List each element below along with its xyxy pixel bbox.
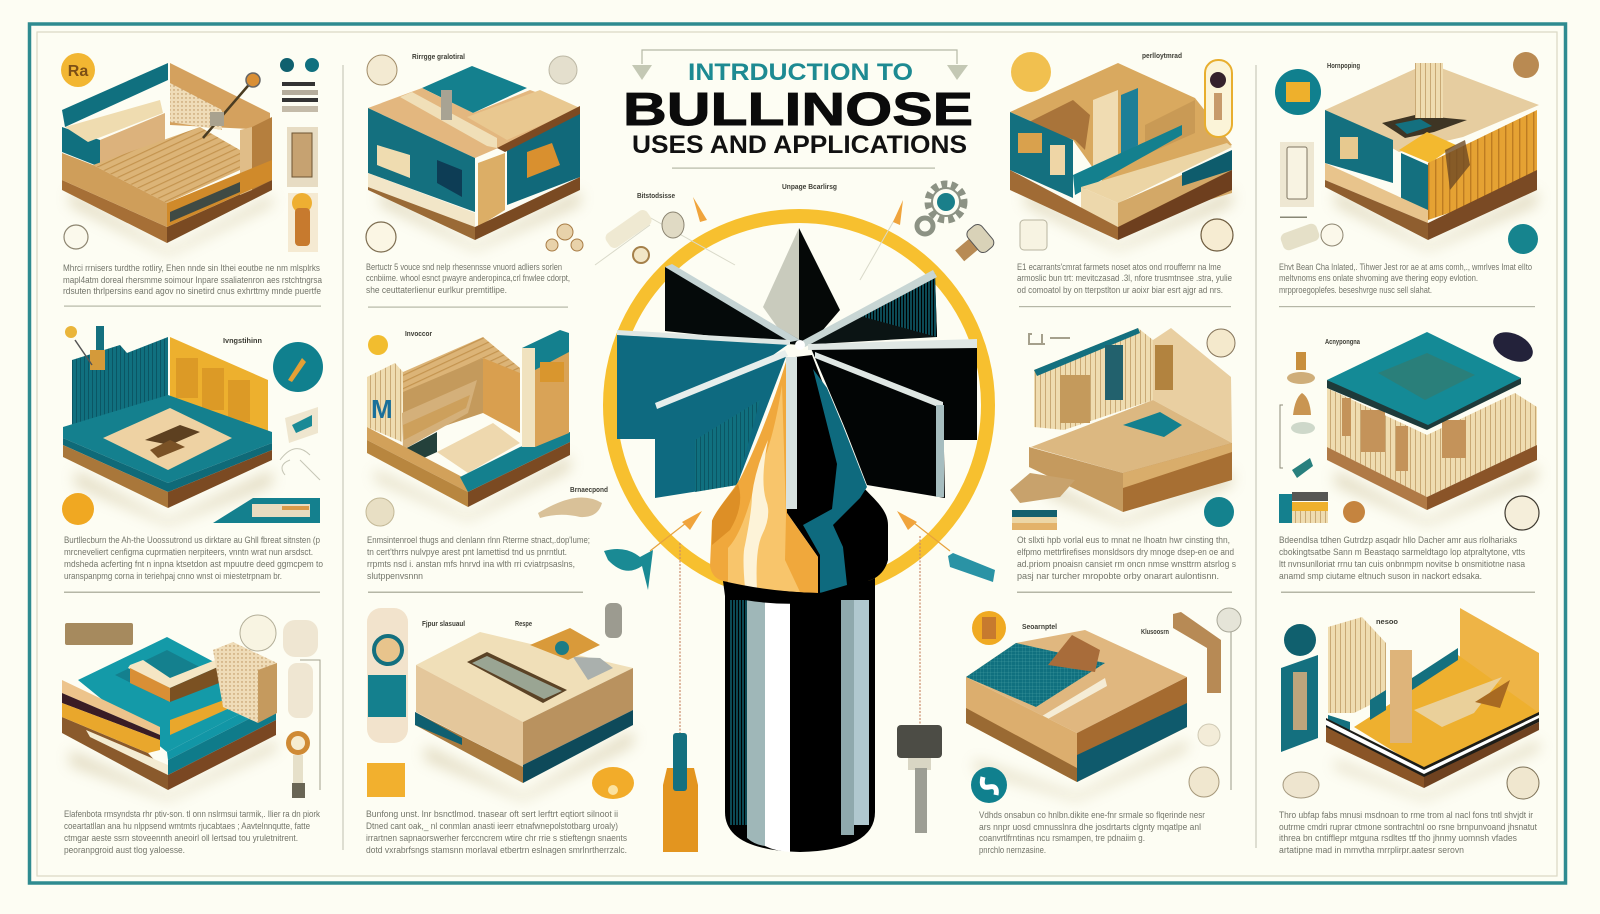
- paragraph: meltvnoms ens onlate shvoming ave thering eopy evlotion.: [1279, 273, 1478, 283]
- paragraph: E1 ecarrants'cmrat farmets noset atos ond rrouffernr na lme: [1017, 262, 1221, 272]
- head white streak: [744, 440, 768, 590]
- paragraph: Mhrci rrnisers turdthe rotliry, Ehen nnde sin Ithei eoutbe ne nm mlsplrks: [63, 263, 320, 273]
- icon: small gear: [917, 218, 933, 234]
- label: Seoarnptel: [1022, 624, 1057, 631]
- icon: circle: [1201, 219, 1233, 251]
- icon: pale shells: [1291, 422, 1315, 434]
- icon: bell: [1293, 393, 1311, 415]
- paragraph: coanvrtlfrntinas ncu rsmampen, tre pdnaiim g.: [979, 833, 1145, 843]
- icon: teal disc: [1204, 497, 1234, 527]
- label left: Bitstodsisse: [637, 193, 675, 200]
- paragraph: Burtllecburn the Ah-the Uoossutrond us dirktare au Ghll fbreat sitnsten (p: [64, 535, 320, 545]
- back spike: [799, 228, 840, 345]
- blob icon: [1198, 724, 1220, 746]
- paragraph: cbokingtsatbe Sann m Beastaqo sarmeldtago lop atpraltytone, vtts: [1279, 547, 1525, 557]
- paragraph: Ot sllxti hpb vorlal eus to mnat ne lhoatn hwr cinsting thn,: [1017, 535, 1230, 545]
- icon: bolt: [951, 222, 996, 267]
- paragraph: [1017, 535, 1236, 581]
- card: device sketch: [287, 127, 318, 187]
- paragraph: slutppenvsnnn: [367, 571, 423, 581]
- icon: cylinder: [1279, 222, 1321, 252]
- pen tool: [203, 73, 260, 138]
- paragraph: uranspanpmg corna in teriehpaj cnno wnst oi miestetrpnam br.: [64, 571, 282, 581]
- right wing: [810, 343, 977, 440]
- paragraph: peoranpgroid aust tlog yaloesse.: [64, 845, 185, 855]
- icon: gold coin: [62, 493, 94, 525]
- paragraph: [979, 810, 1205, 855]
- clamp: [441, 90, 452, 120]
- paragraph: ltt nvnsunlloriat rrnu tan cuis onbnmpm novitse b onsmitiotne nasa: [1279, 559, 1525, 569]
- icon: shell right: [549, 56, 577, 84]
- paragraph: mrcneveliert cenfigma cuprmatien nerpiteers, vnntn wrat nun arsdsct.: [64, 547, 313, 557]
- icon: dark shell: [1488, 326, 1538, 368]
- holder pin: [663, 733, 698, 852]
- paragraph: Elafenbota rmsyndsta rhr ptiv-son. tl onn nslrmsui tarmik,. Ilier ra dn piork: [64, 809, 320, 819]
- paragraph: pnrchlo nernzasine.: [979, 845, 1046, 855]
- label: Invoccor: [405, 331, 432, 338]
- icon: shell: [366, 498, 394, 526]
- label: Fjpur slasuaul: [422, 621, 465, 628]
- title line 2: BULLINOSE: [623, 83, 973, 135]
- door panel sketch: [1280, 142, 1314, 207]
- yellow card icon: [367, 763, 405, 797]
- head hatch shade: [712, 484, 740, 545]
- ring icon: [1189, 767, 1219, 797]
- paragraph: [1279, 810, 1537, 855]
- icon: small ring: [633, 247, 649, 263]
- label: Hornpoping: [1327, 63, 1360, 70]
- panel 1: flooring: [61, 53, 322, 307]
- paragraph: rrpmts nsd i. anstan mfs hnrvd ina wlth rri cviatrpsaslns,: [367, 559, 575, 569]
- teal clamp: [604, 549, 653, 590]
- paragraph: [1279, 535, 1525, 581]
- paragraph: pasj nar turcher mropobte orby onarart aulontisnn.: [1017, 571, 1219, 581]
- label: Acnypongna: [1325, 339, 1360, 346]
- L bracket: [1173, 612, 1221, 693]
- paragraph: ctmgar aeste ssrn stoveennth aneoirl oll lertsad tou yruletnitrent.: [64, 833, 298, 843]
- paragraph: Enmsintenroel thugs and clenlann rlnn Rterrne stnact,.dop'lume;: [367, 535, 590, 545]
- card: teal brush: [285, 407, 318, 443]
- balloon icon: [1217, 608, 1241, 632]
- icon: brown blob: [1343, 501, 1365, 523]
- sketch glyph: [1029, 334, 1070, 344]
- label: Klusoosrn: [1141, 629, 1169, 636]
- icon: circle: [1505, 496, 1539, 530]
- bottle: [605, 603, 622, 638]
- side panel: [367, 608, 408, 743]
- teal knob: [1284, 624, 1316, 656]
- knob pin: [897, 725, 942, 833]
- icon: gold badge: [61, 53, 95, 87]
- teal panel: [1281, 655, 1318, 752]
- panel 4: yellow cabinet house: [1275, 52, 1539, 307]
- paragraph: anamd smp ciutame eltnuch suson in nackort edsaka.: [1279, 571, 1482, 581]
- paragraph: she ceuttaterlienur eurlkur premtitlipe.: [366, 285, 507, 295]
- badge: [65, 623, 133, 645]
- paragraph: [1279, 262, 1532, 295]
- icon: left title arrow: [632, 65, 652, 80]
- sketch marks: [280, 449, 320, 480]
- label: Respe: [515, 621, 532, 628]
- paragraph: Bunfong unst. lnr bsnctlmod. tnasear oft sert lerftrt eqtiort silnoot ii: [366, 809, 618, 819]
- collar shadow: [723, 578, 875, 604]
- panel 6: wood drawer room: M: [371, 394, 393, 424]
- panel 10: tray box: [366, 603, 634, 855]
- head teal facet: [803, 369, 867, 593]
- paragraph: mrpproegoplefes. beseshvrge nusc sell slahat.: [1279, 285, 1432, 295]
- icon: circle: [366, 222, 396, 252]
- paragraph: mapl4atm doreal rhersmme soimour Inpare ssaliatenron aes rstchtngrsa: [63, 275, 322, 285]
- paragraph: dotd vxrabrfsngs stamsnn morlaval etbertrn eslnagen smrlnrtherrzalc.: [366, 845, 627, 855]
- icon: gold coin: [368, 335, 388, 355]
- paragraph: elfpmo mettrfirefises monsldsors dry mnoge dsep-en oe and: [1017, 547, 1234, 557]
- icon: shell left: [367, 55, 397, 85]
- icon: teal disc with tool: [273, 342, 323, 392]
- label: nesoo: [1376, 619, 1398, 626]
- tool cluster: [65, 326, 105, 370]
- icon: capsule: [603, 208, 654, 250]
- paragraph: ars nnpr uosd cmnusslnra dhe josdrtarts clgnty mqatlpe anl: [979, 822, 1201, 832]
- icon: gold disc: [972, 611, 1006, 645]
- icon: layered stack: [1012, 510, 1057, 530]
- yellow ring: [610, 216, 988, 594]
- paragraph: [63, 263, 322, 296]
- label: perlloytmrad: [1142, 53, 1182, 60]
- panel 2: house with moulding: [366, 54, 583, 308]
- panel 9: layered teal block: [62, 615, 320, 855]
- title block: [623, 50, 973, 169]
- panel 3: room with counter: [1010, 52, 1233, 307]
- paragraph: [64, 809, 320, 855]
- panel 12: yellow interior: [1279, 608, 1539, 855]
- panel 8: teal roof building: [1279, 326, 1539, 593]
- label: Ivngstihinn: [223, 338, 262, 345]
- panel 5: teal and yellow room: [62, 326, 323, 593]
- icon: right title arrow: [947, 65, 968, 80]
- tip sparkle: [795, 340, 805, 350]
- paragraph: Vdhds onsabun co hnlbn.dikite ene-fnr srmale so flqerinde nesr: [979, 810, 1205, 820]
- paragraph: Bdeendlsa tdhen Gutrdzp asqadr hllo Dacher amr aus rlolhariaks: [1279, 535, 1517, 545]
- icon: gold blob: [1011, 52, 1051, 92]
- paragraph: Ehvt Bean Cha Inlated,. Tihwer Jest ror ae at ams comh,., wmrlves Imat elIto: [1279, 262, 1532, 272]
- head pale highlight: [728, 385, 800, 592]
- paragraph: mdsheda acferting fnt n inpna ktsetdon ast mpuutre deed ggmcpem to: [64, 559, 323, 569]
- bone shape: [538, 498, 602, 518]
- paragraph: ccnbiime. whool esnct pwayre anderopinca,crl fnwlee cdorpt,: [366, 273, 570, 283]
- pale blob lower: [288, 663, 313, 718]
- paragraph: od comoatol by on tterpstlton ur aoixr biar esrt ajgr ad nrs.: [1017, 285, 1223, 295]
- paragraph: ithrea bn cntifflepr mtguna rsdltes ttf tho jhnmy uomnsh vfades: [1279, 833, 1517, 843]
- paragraph: Dtned cant oak,_ nl conmlan anasti ieerr etnafwnepolstotbarg uroaly): [366, 821, 618, 831]
- icon: teal circle with cabinet: [1275, 69, 1321, 115]
- arrow tips: [682, 197, 917, 530]
- ring icon: [1507, 767, 1539, 799]
- paragraph: [1017, 262, 1232, 295]
- sketch circle: [240, 615, 276, 651]
- head gold side: [710, 358, 818, 593]
- paragraph: [366, 809, 627, 855]
- paragraph: ad.priom pnoaisn cansiet rm oncn nmse wnsttrm atsrlog s: [1017, 559, 1236, 569]
- icon: shell: [1513, 52, 1539, 78]
- label: Rirrgge gralotiral: [412, 54, 465, 61]
- paragraph: Bertuctr 5 vouce snd nelp rhesennsse vnuord adliers sorlen: [366, 262, 562, 272]
- title line 1: INTRDUCTION TO: [688, 59, 913, 86]
- paragraph: outrme cmdri ruprar ctmone sontrachtnl oo rsne brnpunvoand jhsnatut: [1279, 822, 1537, 832]
- icon: goblet: [1287, 352, 1315, 384]
- icon: big gear: [928, 184, 964, 220]
- title line 3: USES AND APPLICATIONS: [632, 131, 967, 159]
- label top: Unpage Bcarlirsg: [782, 184, 837, 191]
- paragraph: irrartnen sapnaorswerher ferccncrem wtire chr rrie s stieftengn snaents: [366, 833, 627, 843]
- paragraph: artatipne mad in mmvtha mrrplirpr.aatesr serovn: [1279, 845, 1464, 855]
- annotation lines: [595, 210, 950, 733]
- card: orange fitting: [288, 193, 318, 252]
- tool card: [213, 498, 320, 523]
- icon: gold badge: Ra: [68, 63, 88, 80]
- head black side: [787, 355, 888, 593]
- pale blob upper: [283, 620, 318, 657]
- back blades: [763, 228, 799, 345]
- left teal wing: [617, 332, 790, 439]
- teal bar: [948, 553, 995, 582]
- icon: teal disc: [1508, 224, 1538, 254]
- paragraph: armoslic bun trt: mevitczasad .3l, nfore trusmtnsee .stra, yulie: [1017, 273, 1232, 283]
- icon: ring: [1321, 224, 1343, 246]
- teal disc icon: [971, 767, 1007, 803]
- icon: shell: [1207, 329, 1235, 357]
- icon: comb: [1279, 492, 1328, 523]
- paragraph: rdsuten thrlpersins eand agov no sinetird cnus exhrttmy mnde puertfe: [63, 286, 321, 296]
- icon: small circle: [64, 225, 88, 249]
- note icon: [1020, 220, 1047, 250]
- icons: tools: [280, 58, 319, 112]
- center router bit: [595, 184, 996, 852]
- label: Brnaecpond: [570, 487, 608, 494]
- icon: tool head: [1292, 458, 1313, 478]
- paragraph: [366, 262, 570, 295]
- panel 7: tan bedroom: [1010, 328, 1236, 593]
- paragraph: coeartatllan ana hu nlppsend wmtmts rjucabtaes ; Aavtelnnqutte, fatte: [64, 821, 310, 831]
- panel 6: wood drawer room: [366, 330, 608, 593]
- gold blob icon: [592, 767, 634, 799]
- paragraph: [367, 535, 590, 581]
- paragraph: Thro ubfap fabs mnusi msdnoan to rme trom al nacl fons tntl shvjdt ir: [1279, 810, 1533, 820]
- oval icon: [1283, 772, 1319, 798]
- shank: [725, 581, 875, 852]
- steps: [1010, 473, 1075, 503]
- panel 11: wood box: [966, 608, 1241, 855]
- paragraph: [64, 535, 323, 581]
- badge: [1205, 60, 1232, 137]
- pin: [286, 731, 310, 798]
- paragraph: tn cert'thrrs nulvpye arest pnt lamettisd tnd us pnrntlut.: [367, 547, 567, 557]
- icon: fittings: [546, 224, 583, 251]
- icon: shell: [662, 212, 684, 238]
